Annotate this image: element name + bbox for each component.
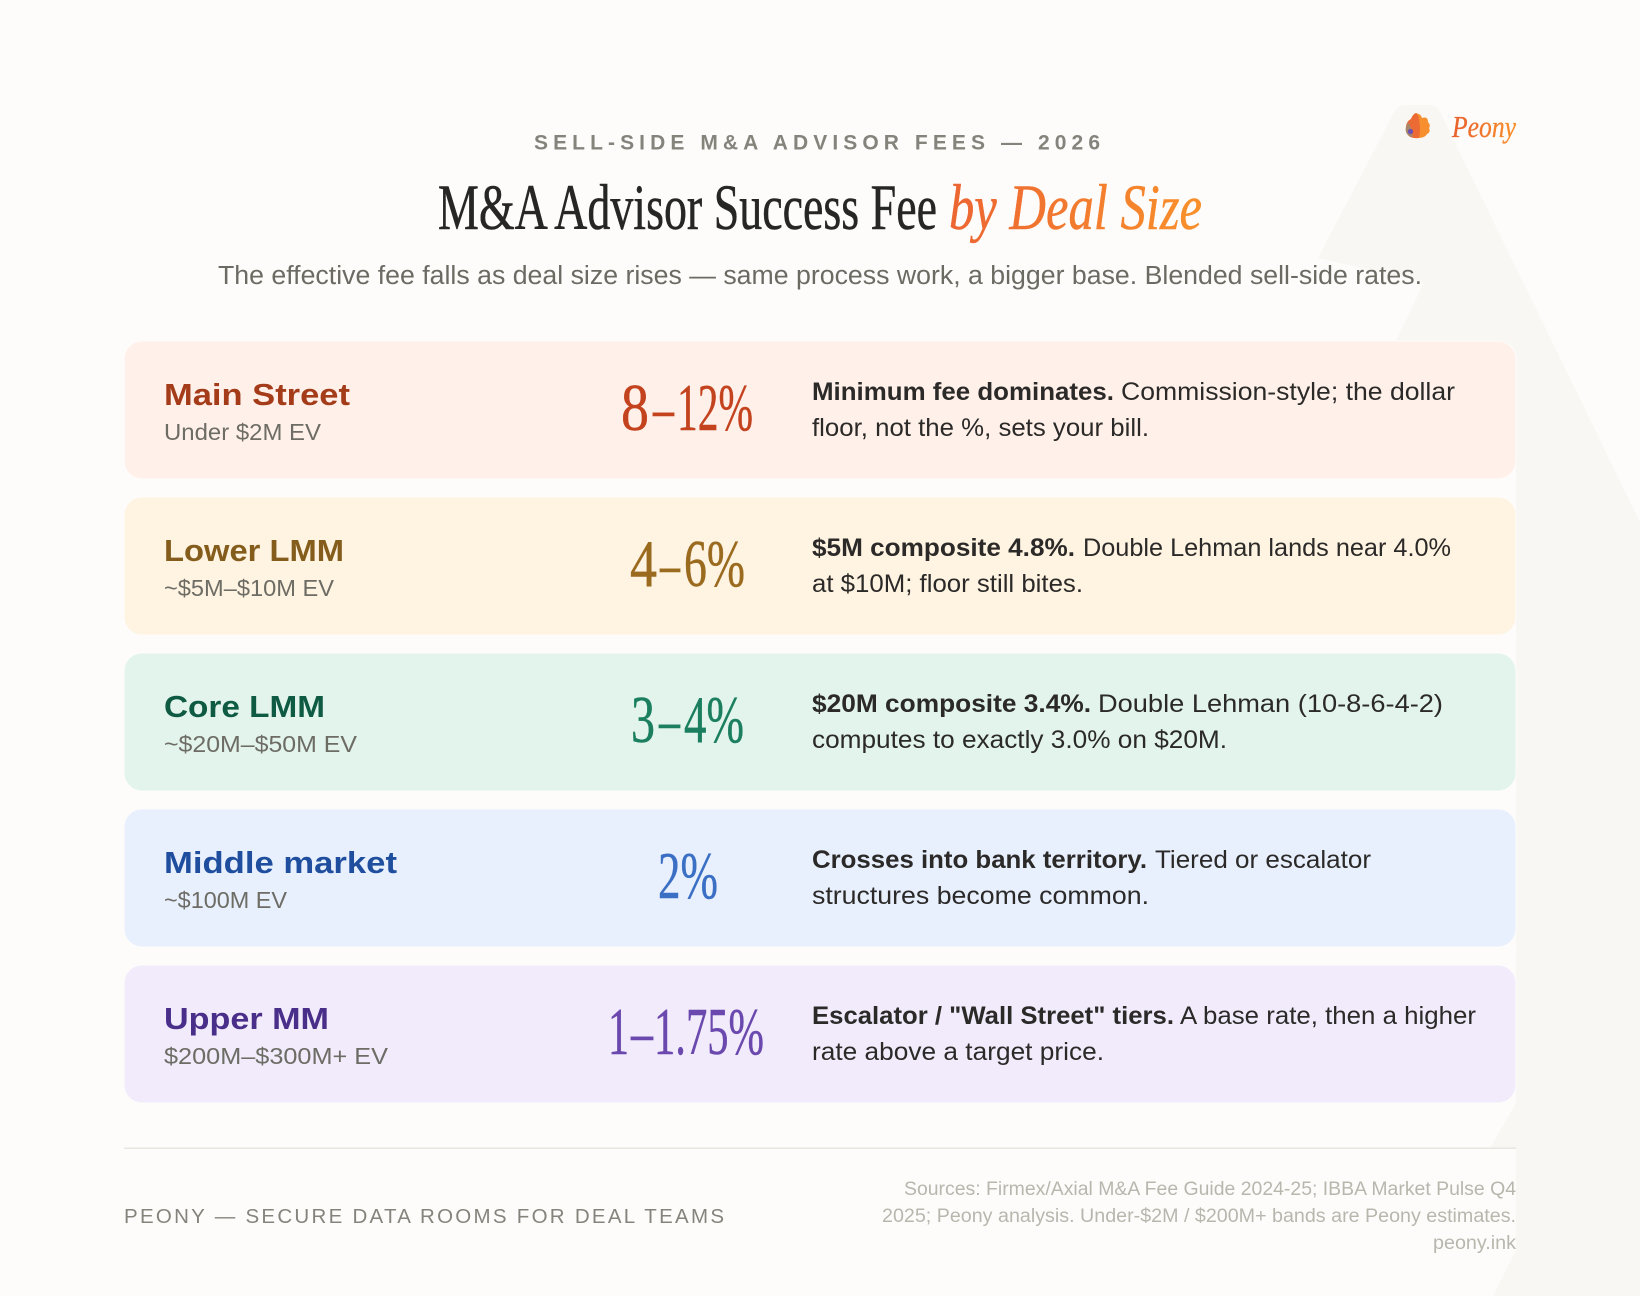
header eyebrow: SELL-SIDE M&A ADVISOR FEES — 2026 xyxy=(534,132,1100,154)
EV range: Under $2M EV xyxy=(164,419,322,445)
panel: Middle market xyxy=(124,809,1516,947)
EV range: ~$20M–$50M EV xyxy=(164,731,358,757)
footer sources xyxy=(882,1179,1517,1254)
description: $5M composite 4.8%. xyxy=(812,534,1075,562)
description xyxy=(812,846,1371,910)
icon: peony flower xyxy=(1406,113,1430,138)
footer sources: 2025; Peony analysis. Under-$2M / $200M+ bands are Peony estimates. xyxy=(882,1206,1516,1227)
description: Double Lehman lands near 4.0% xyxy=(1083,534,1451,562)
EV range: $200M–$300M+ EV xyxy=(164,1043,389,1069)
description: Crosses into bank territory. xyxy=(812,846,1147,874)
fee value xyxy=(608,995,764,1069)
description xyxy=(812,690,1443,754)
panel: Upper MM xyxy=(124,965,1516,1103)
panel: Core LMM xyxy=(124,653,1516,791)
footer sources: peony.ink xyxy=(1433,1233,1517,1254)
description: computes to exactly 3.0% on $20M. xyxy=(812,726,1227,754)
description: structures become common. xyxy=(812,882,1149,910)
title: by Deal Size xyxy=(949,172,1202,244)
description: Escalator / "Wall Street" tiers. xyxy=(812,1002,1174,1030)
tier name: Main Street xyxy=(164,377,350,412)
fee value: – xyxy=(630,995,653,1069)
tier name: Lower LMM xyxy=(164,533,344,568)
fee value: 1.75% xyxy=(654,995,764,1069)
fee value: – xyxy=(658,683,680,757)
description: Commission-style; the dollar xyxy=(1121,378,1455,406)
fee value: 8 xyxy=(621,371,649,445)
fee value xyxy=(631,683,744,757)
fee value xyxy=(630,527,745,601)
fee value: 2% xyxy=(658,839,718,913)
EV range: ~$5M–$10M EV xyxy=(164,575,335,601)
tier name: Core LMM xyxy=(164,689,325,724)
fee value: 6% xyxy=(684,527,745,601)
fee value: 12% xyxy=(677,371,753,445)
description: at $10M; floor still bites. xyxy=(812,570,1083,598)
title: M&A Advisor Success Fee xyxy=(438,172,937,244)
wordmark: Peony xyxy=(1451,109,1516,144)
logo: Peony xyxy=(1406,109,1516,144)
panel: Main Street xyxy=(124,341,1516,479)
description xyxy=(812,378,1455,442)
fee value xyxy=(621,371,753,445)
description: Tiered or escalator xyxy=(1155,846,1371,874)
subtitle: The effective fee falls as deal size rises — same process work, a bigger base. Blended sell-side rates. xyxy=(218,262,1422,290)
fee value: 4 xyxy=(630,527,657,601)
description xyxy=(812,1002,1476,1066)
description: rate above a target price. xyxy=(812,1038,1104,1066)
tier name: Middle market xyxy=(164,845,397,880)
footer tagline: PEONY — SECURE DATA ROOMS FOR DEAL TEAMS xyxy=(124,1205,724,1228)
fee value: – xyxy=(652,371,674,445)
fee value: – xyxy=(659,527,680,601)
fee value: 1 xyxy=(608,995,629,1069)
panel: Lower LMM xyxy=(124,497,1516,635)
description: floor, not the %, sets your bill. xyxy=(812,414,1149,442)
description: A base rate, then a higher xyxy=(1180,1002,1476,1030)
description xyxy=(812,534,1451,598)
EV range: ~$100M EV xyxy=(164,887,288,913)
description: Minimum fee dominates. xyxy=(812,378,1114,406)
fee value: 4% xyxy=(684,683,744,757)
description: $20M composite 3.4%. xyxy=(812,690,1091,718)
tier name: Upper MM xyxy=(164,1001,329,1036)
description: Double Lehman (10-8-6-4-2) xyxy=(1098,690,1443,718)
footer sources: Sources: Firmex/Axial M&A Fee Guide 2024-25; IBBA Market Pulse Q4 xyxy=(904,1179,1516,1200)
fee value: 3 xyxy=(631,683,655,757)
